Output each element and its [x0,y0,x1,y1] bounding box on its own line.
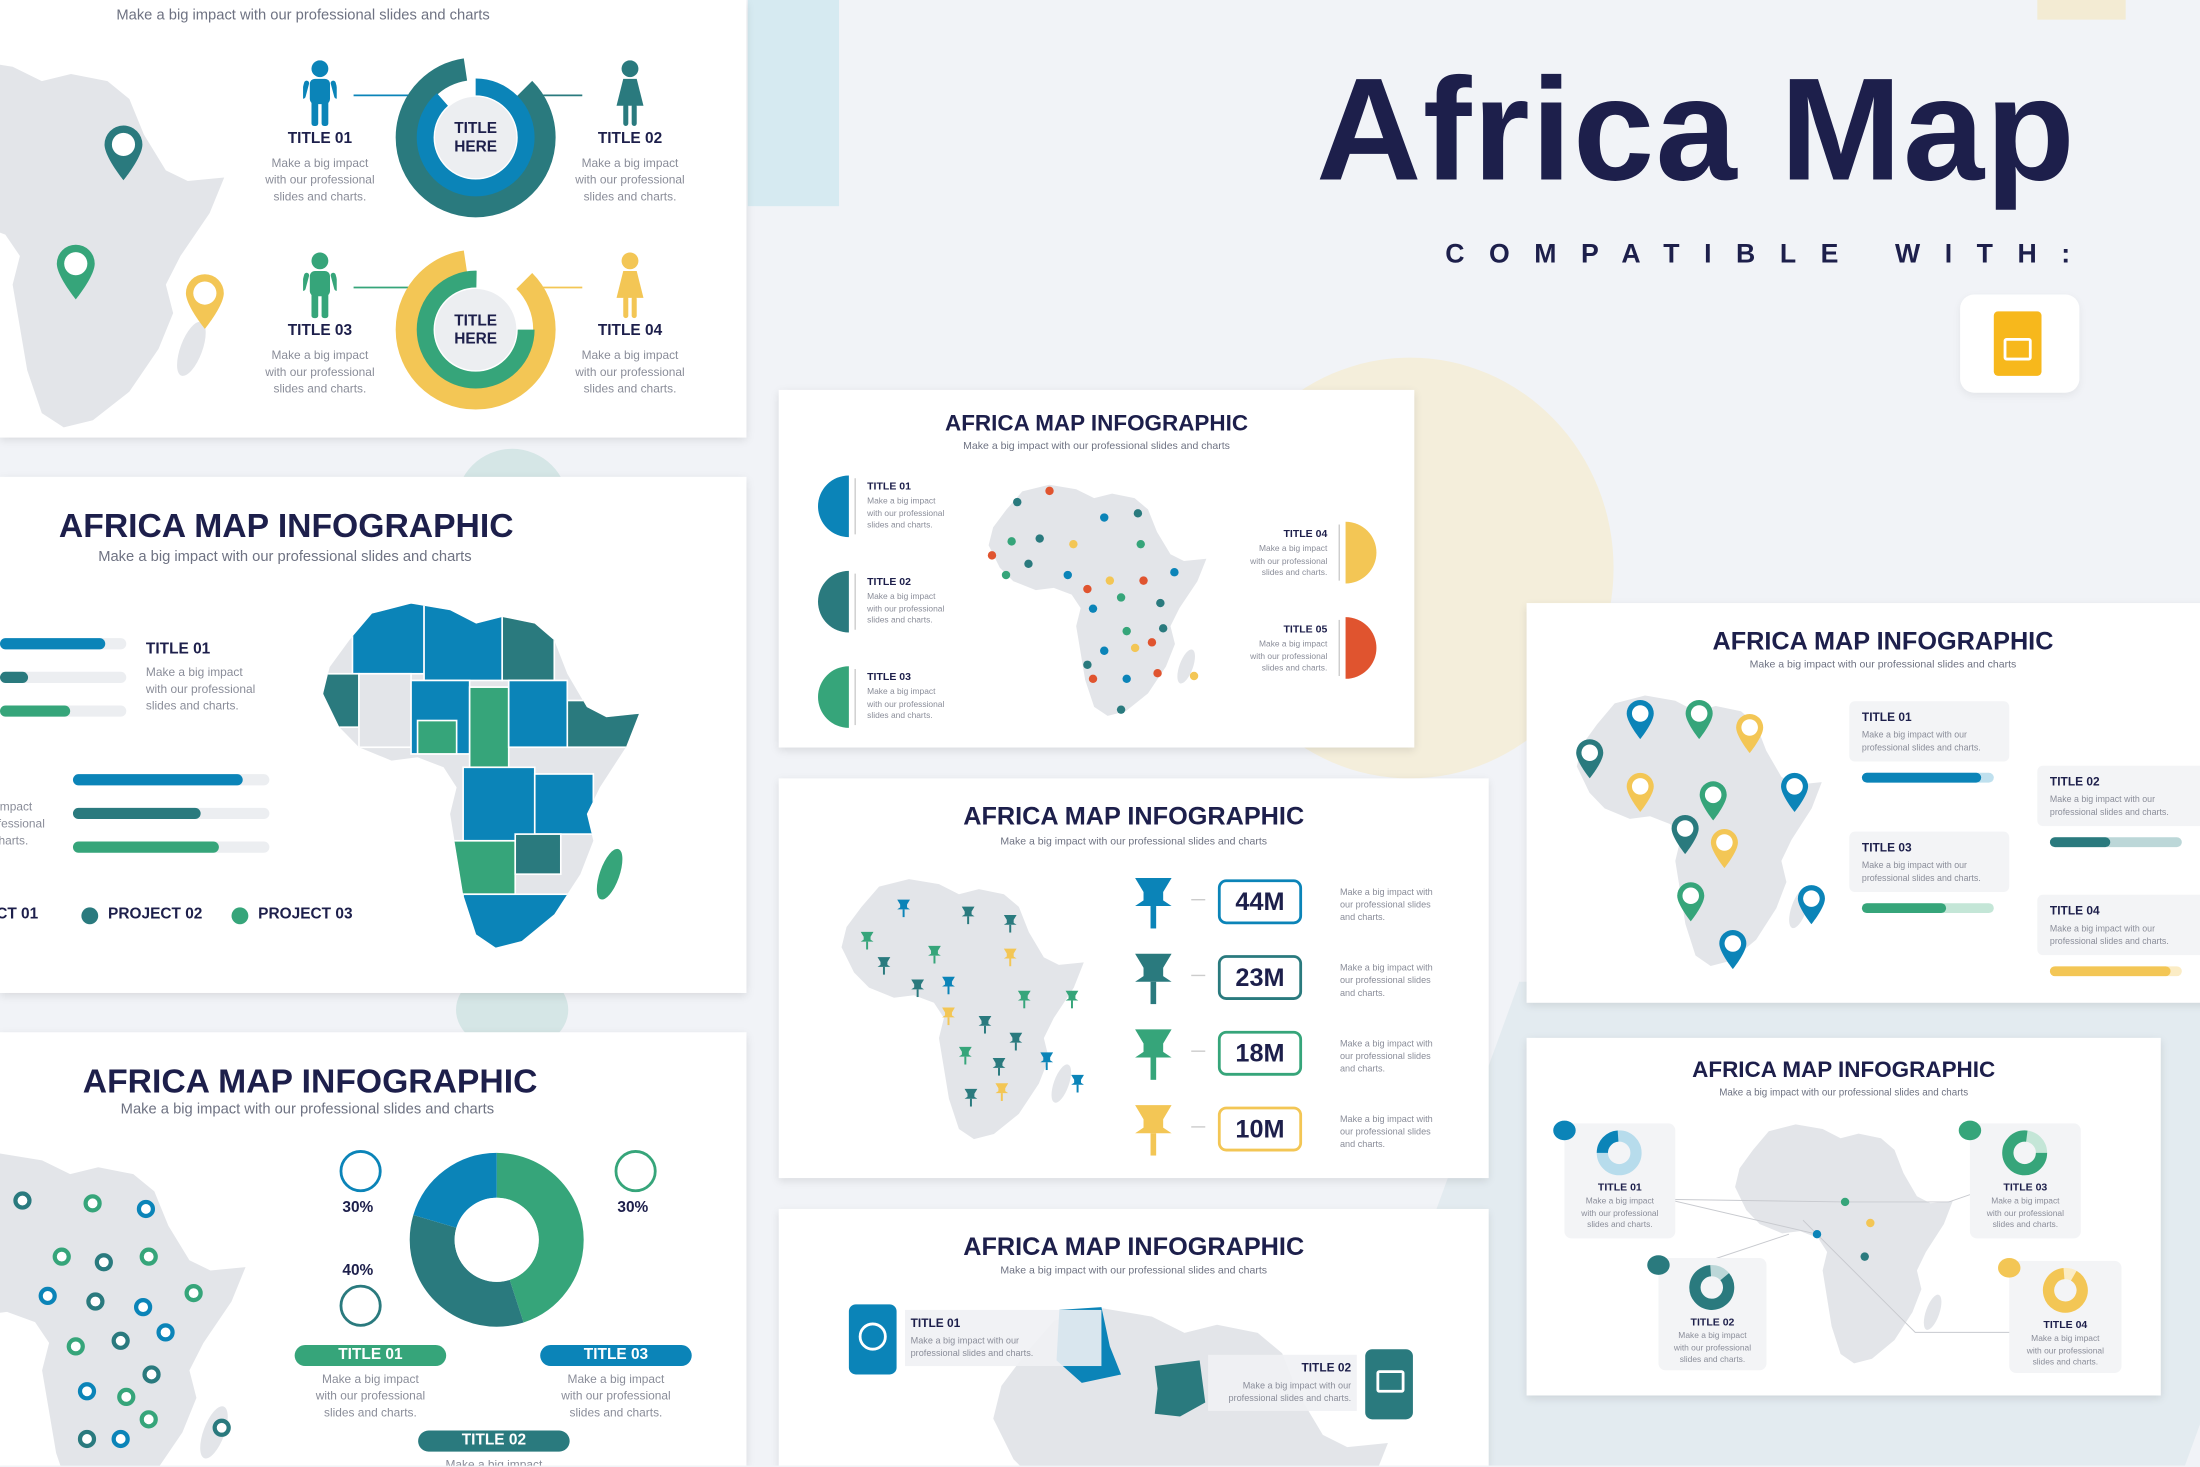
card: title 02: professional slides and charts. [2050,808,2169,818]
card: title 02: Make a big impact with our [2050,795,2155,805]
card: title 03: TITLE 03 [1862,840,1912,854]
text: title 04: Make a big impact [582,348,678,362]
pill: title 01: slides and charts. [324,1405,417,1419]
callout: title 02: Make a big impact with our [1243,1381,1351,1391]
value row 10M [1135,1105,1433,1156]
card: title 04: slides and charts. [2033,1359,2098,1367]
card: title 04: Make a big impact with our [2050,924,2155,934]
value row 18M [1135,1029,1433,1080]
heading: AFRICA MAP INFOGRAPHIC [59,508,514,546]
panel: slide 2 project bars [0,477,746,993]
icons and percentages: 30% [342,1199,373,1216]
heading: AFRICA MAP INFOGRAPHIC [963,1233,1304,1261]
pill: title 01: with our professional [316,1388,425,1402]
map: colored africa [323,604,639,948]
text: title 03: TITLE 03 [288,323,352,339]
icons and percentages: 30% [617,1199,648,1216]
pill: title 01: Make a big impact [322,1372,419,1386]
card: title 03 [1970,1123,2081,1238]
donut 2 [354,250,582,410]
item: title 01: with our professional [867,510,944,518]
text: title 01: slides and charts. [273,189,366,203]
icon: person title 01 [303,60,337,126]
card: title 04: TITLE 04 [2050,903,2100,917]
text: title 01: with our professional [265,173,375,187]
subtitle: Make a big impact with our professional slides and charts [1719,1088,1968,1098]
heading: AFRICA MAP INFOGRAPHIC [945,412,1248,436]
pill: title 03 [540,1345,692,1419]
map with pins [1576,696,1825,969]
card: title 04 [2009,1261,2121,1373]
card: title 03: professional slides and charts. [1862,874,1981,884]
value row 10M: our professional slides [1340,1128,1431,1137]
callout: title 01: professional slides and charts. [911,1349,1033,1359]
heading: AFRICA MAP INFOGRAPHIC [963,802,1304,830]
item: title 01: Make a big impact [867,498,935,506]
text: title 03: with our professional [265,365,375,379]
text: title 01: TITLE 01 [146,641,210,658]
map partial with highlights [993,1307,1388,1466]
value row 44M: Make a big impact with [1340,888,1433,898]
value row 23M [1135,954,1433,1004]
subtitle: Make a big impact with our professional slides and charts [1000,834,1267,847]
text: title 01: Make a big impact [146,665,243,679]
item: title 03: with our professional [867,701,944,709]
item: title 05: Make a big impact [1259,641,1327,649]
item: title 04: with our professional [1250,557,1327,566]
donut 2: TITLE [454,312,497,329]
pill: title 01: TITLE 01 [338,1346,403,1363]
pill: title 03: slides and charts. [570,1405,662,1419]
item: title 02: Make a big impact [867,593,935,602]
icons and percentages [340,1150,657,1327]
card: title 03: with our professional [1987,1210,2064,1218]
icons and percentages: 40% [342,1262,373,1279]
item: title 03: slides and charts. [867,712,933,721]
donut 1 [354,58,582,218]
heading: AFRICA MAP INFOGRAPHIC [83,1063,537,1101]
text: title 04 [575,323,685,396]
text: title 02 [0,799,45,847]
pill: title 01 [294,1345,446,1419]
value row 23M: Make a big impact with [1340,964,1433,973]
pill: title 03: with our professional [561,1388,671,1402]
pill: title 03: TITLE 03 [584,1346,648,1363]
bars group 2 [72,774,270,853]
callout: title 02 [1208,1349,1413,1420]
item: title 01 [818,476,944,538]
card: title 04 [2037,895,2200,985]
heading: AFRICA MAP INFOGRAPHIC [1712,627,2053,655]
text: title 02: TITLE 02 [598,130,662,147]
heading: AFRICA MAP INFOGRAPHIC [1692,1059,1995,1083]
text: title 02: Make a big impact [582,156,678,170]
item: title 04: slides and charts. [1262,569,1327,578]
value row 18M: our professional slides [1340,1052,1431,1062]
value row 44M: and charts. [1340,913,1385,923]
panel: slide 3 donut percentages [0,1032,746,1467]
icon: person title 03 [303,252,337,318]
subtitle: Make a big impact with our professional slides and charts [98,548,472,565]
text: title 01: Make a big impact [271,156,368,170]
subtitle: Make a big impact with our professional slides and charts [116,7,490,24]
panel: slide 8 ring cards [1527,1038,2161,1395]
item: title 04 [1250,522,1376,584]
item: title 05: TITLE 05 [1283,623,1327,635]
card: title 03: TITLE 03 [2003,1181,2047,1194]
subtitle: Make a big impact with our professional slides and charts [121,1101,494,1118]
text: title 01: with our professional [146,682,255,696]
panel: slide 6 highlighted countries [779,1209,1489,1467]
card: title 02: Make a big impact [1678,1332,1747,1341]
legend: PROJECT 02 [108,906,202,923]
item: title 02 [818,570,944,632]
item: title 05: with our professional [1250,653,1327,661]
subtitle: Make a big impact with our professional slides and charts [1750,658,2016,670]
callout: title 01: TITLE 01 [911,1316,960,1330]
item: title 05: slides and charts. [1262,665,1327,673]
card: title 01: Make a big impact [1586,1198,1654,1206]
item: title 03: Make a big impact [867,689,935,697]
pill: title 02: TITLE 02 [462,1432,526,1449]
text: title 03: Make a big impact [271,348,368,362]
card: title 02 [1658,1258,1767,1370]
text: title 02 [575,130,685,203]
text: title 02: slides and charts. [584,189,676,203]
value row 18M: and charts. [1340,1064,1385,1074]
value row 23M: our professional slides [1340,976,1431,986]
item: title 03: TITLE 03 [867,670,911,683]
card: title 03 [1850,832,2009,913]
card: title 01 [1850,702,2009,783]
item: title 03 [818,666,944,728]
value row 18M: 18M [1235,1039,1285,1067]
card: title 02: slides and charts. [1680,1356,1745,1365]
card: title 01: TITLE 01 [1598,1181,1642,1194]
pill: title 02 [418,1430,570,1466]
card: title 02: TITLE 02 [2050,774,2100,788]
card: title 01: TITLE 01 [1862,710,1912,724]
card: title 04: TITLE 04 [2043,1318,2087,1331]
card: title 03: Make a big impact [1991,1198,2060,1206]
value row 10M: Make a big impact with [1340,1115,1433,1125]
card: title 04: professional slides and charts. [2050,937,2169,947]
map with tacks [842,879,1084,1139]
legend [0,906,353,924]
card: title 01: slides and charts. [1587,1222,1653,1230]
value row 23M: 23M [1235,964,1285,992]
panel: slide 5 pushpin values [779,778,1489,1178]
value row 44M: 44M [1235,888,1285,916]
panel: slide 7 pins and bars [1527,603,2200,1003]
card: title 01: with our professional [1581,1210,1658,1218]
text: title 04: with our professional [575,365,685,379]
text: title 01 [146,641,255,712]
value row 10M: and charts. [1340,1140,1385,1150]
item: title 01: slides and charts. [867,522,933,530]
card: title 01: professional slides and charts. [1862,743,1981,753]
card: title 04: with our professional [2027,1347,2104,1356]
legend: PROJECT 03 [258,906,353,923]
text: title 01: TITLE 01 [288,130,352,147]
text: title 03 [265,323,375,396]
icon: person title 04 [616,252,644,318]
value row 44M [1135,878,1433,928]
card: title 02: with our professional [1674,1344,1751,1353]
subtitle: Make a big impact with our professional slides and charts [963,439,1230,452]
donut chart [410,1152,584,1327]
panel: slide 4 dots map [779,390,1414,748]
map with pins [0,64,224,428]
subtitle: compatible with: COMPATIBLE WITH: [1445,240,2095,269]
card: title 02: TITLE 02 [1691,1316,1734,1328]
item: title 01: TITLE 01 [867,480,911,492]
card: title 02 [2038,766,2200,848]
callout: title 02: professional slides and charts. [1229,1394,1351,1404]
map with dots [0,1154,246,1466]
icon: google slides [1960,295,2079,393]
item: title 02: slides and charts. [867,617,933,626]
value row 23M: and charts. [1340,989,1385,999]
card: title 03: slides and charts. [1993,1222,2058,1230]
donut 2: HERE [454,331,497,348]
callout: title 01 [848,1304,1102,1374]
text: title 04: slides and charts. [584,381,676,396]
text: title 01 [265,130,375,203]
card: title 01: Make a big impact with our [1862,731,1967,741]
text: title 03: slides and charts. [273,381,366,396]
text: title 02: with our professional [575,173,685,187]
card: title 04: Make a big impact [2031,1335,2100,1344]
item: title 02: with our professional [867,605,944,614]
value row 18M: Make a big impact with [1340,1039,1433,1049]
item: title 04: TITLE 04 [1283,527,1327,540]
subtitle: Make a big impact with our professional slides and charts [1000,1264,1267,1276]
donut 1: TITLE [454,120,497,137]
callout: title 01: Make a big impact with our [911,1337,1019,1346]
donut 1: HERE [454,138,497,155]
value row 44M: our professional slides [1340,900,1431,910]
title: Africa Map: Africa Map [1316,49,2076,212]
text: title 04: TITLE 04 [598,323,662,339]
item: title 05 [1250,617,1376,679]
map with connectors [1733,1122,1957,1377]
value row 10M: 10M [1235,1115,1285,1143]
callout: title 02: TITLE 02 [1301,1360,1351,1374]
map with dots [988,484,1206,716]
text: title 01: slides and charts. [146,698,239,712]
card: title 03: Make a big impact with our [1862,861,1967,871]
bars group 1 [0,638,126,717]
panel: slide 1 people donuts [0,0,746,438]
icon: person title 02 [616,60,644,126]
card: title 01 [1564,1123,1675,1238]
pill: title 03: Make a big impact [568,1372,664,1386]
item: title 02: TITLE 02 [867,575,911,588]
item: title 04: Make a big impact [1259,546,1327,554]
